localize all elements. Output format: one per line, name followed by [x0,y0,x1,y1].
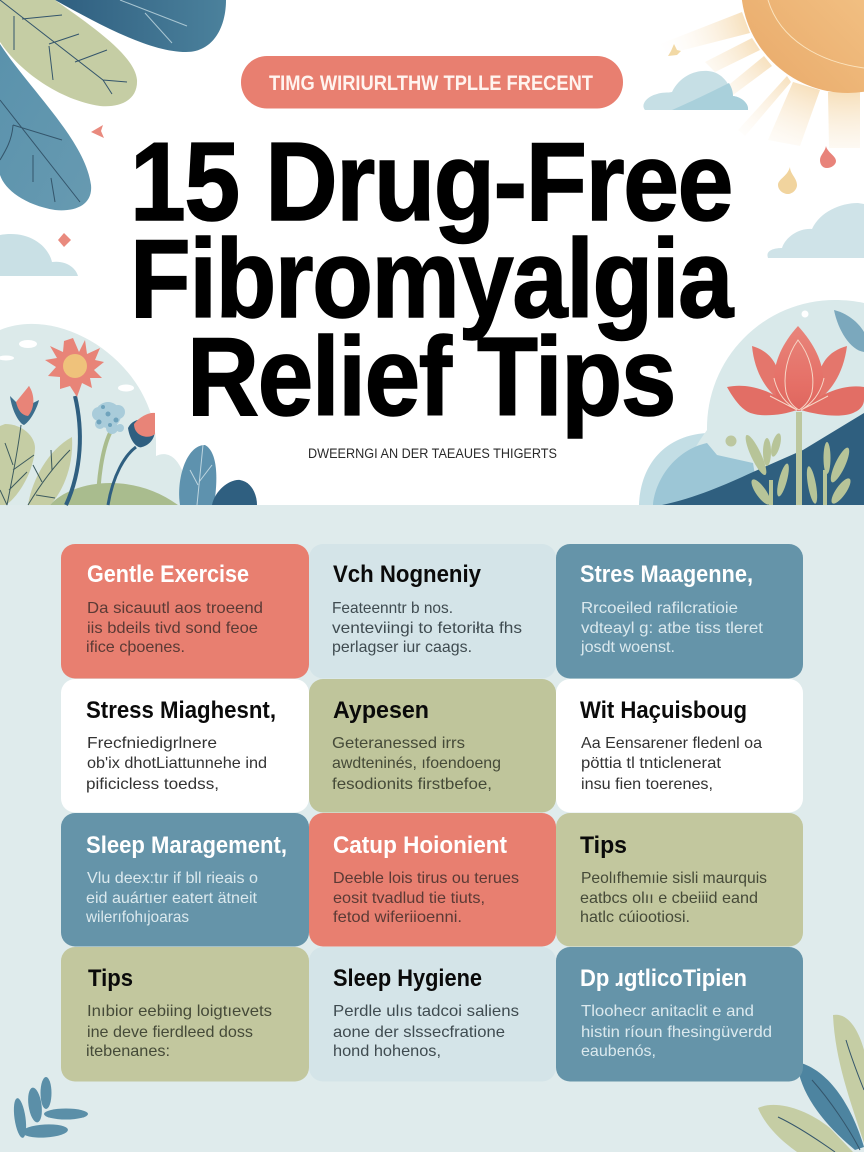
icon: yellow drop [778,167,797,194]
card: Aypesen: Aypesen [333,697,429,724]
card: Sleep Hygiene [309,947,556,1082]
card: Sleep Maragement: eid auártıer eatert ätneit [86,890,258,907]
card: Aypesen: awdteninés, ıfoendoeng [332,755,501,772]
card: Dp gticoTipien [556,947,803,1082]
illustration: small blue cloud [643,71,748,110]
card: Vch Nogneniy: Vch Nogneniy [333,561,482,588]
card: Tips (row 4): itebenanes: [86,1043,170,1060]
card: Aypesen: Geteranessed irrs [332,735,465,752]
card: Tips (row 4): Tips [88,965,133,992]
illustration: left cloud [0,234,78,276]
card: Sleep Hygiene: aone der slssecfratione [333,1024,505,1041]
card: Tips (row 4): ine deve fierdleed doss [87,1024,253,1041]
card: Stres Maagenne: Stres Maagenne, [580,561,753,588]
illustration: bottom-right leaves [758,1015,864,1152]
card: Sleep Maragement: Vlu deex:tır if bll rieais o [87,870,258,887]
card: Tips (row 4): Inıbior eebiing loigtıevets [87,1003,272,1020]
card: Stress Miaghesnt: ob'ix dhotLiattunnehe ind [87,755,267,772]
card: Gentle Exercise: Gentle Exercise [87,561,249,588]
card: Dp gticoTipien: Tloohecr anitaclit e and [581,1003,754,1020]
card: Tips (row 4) [61,947,309,1082]
title: Relief Tips [187,315,675,439]
card: Stress Miaghesnt: Frecfniedigrlnere [87,735,217,752]
card: Vch Nogneniy: Feateenntr b nos. [332,600,453,617]
card: Sleep Hygiene: hond hohenos, [333,1043,441,1060]
card: Gentle Exercise [61,544,309,678]
icon: yellow star [668,44,681,56]
subtitle: DWEERNGI AN DER TAEAUES THIGERTS [308,446,557,461]
card: Stres Maagenne: vdteayl g: atbe tiss tleret [581,620,764,637]
card: Catup Hoionient: eosit tvadlud tie tiuts, [333,890,485,907]
card: Catup Hoionient [309,813,556,946]
icon: coral arrow spark [91,125,104,138]
badge pill: TIMG WIRIURLTHW TPLLE FRECENT [269,72,593,95]
card: Aypesen: fesodionits firstbefoe, [332,776,492,793]
illustration: right cloud [767,203,864,258]
title [130,120,734,439]
illustration: bottom-right lotus scene [639,300,864,507]
card: Tips (row 3) [556,813,803,946]
badge pill [241,56,623,108]
card: Catup Hoionient: fetod wiferiioenni. [333,909,462,926]
card: Stres Maagenne: josdt woenst. [580,639,675,656]
card: Wit Hacuisboug: Wit Haçuisboug [580,697,747,724]
card: Sleep Maragement: wilerıfohıjoaras [85,909,189,926]
card: Wit Hacuisboug: insu fien toerenes, [581,776,713,793]
card: Wit Hacuisboug: Aa Eensarener fledenl oa [581,735,762,752]
card: Wit Hacuisboug [556,679,803,812]
icon: coral diamond [58,233,71,247]
card: Vch Nogneniy: perlagser iur caags. [332,639,472,656]
card: Dp gticoTipien: eaubenós, [581,1043,656,1060]
illustration: bottom-left flower garden [0,324,257,505]
illustration: sun with rays [660,0,864,148]
card: Catup Hoionient: Catup Hoionient [333,832,507,859]
illustration: top-left leaves [0,0,226,210]
card: Dp gticoTipien: histin ríoun fhesingüverdd [581,1024,772,1041]
card: Stress Miaghesnt: Stress Miaghesnt, [86,697,276,724]
title: 15 Drug-Free [130,120,732,244]
card: Stress Miaghesnt: pificicless toedss, [86,776,219,793]
card: Wit Hacuisboug: pöttia tl tnticlenerat [581,755,722,772]
card: Gentle Exercise: Da sicauutl aos troeend [87,600,263,617]
card: Aypesen [309,679,556,812]
card: Vch Nogneniy [309,544,556,678]
card: Tips (row 3): eatbcs olıı e cbeiiid eand [580,890,758,907]
card: Tips (row 3): Peolıfhemıie sisli maurquis [581,870,767,887]
card: Stres Maagenne: Rrcoeiled rafilcratioie [581,600,738,617]
card: Sleep Hygiene: Sleep Hygiene [333,965,482,992]
background: lower panel [0,505,864,1152]
card: Gentle Exercise: iis bdeils tivd sond feoe [87,620,258,637]
card: Sleep Hygiene: Perdle ulıs tadcoi saliens [333,1003,519,1020]
card: Stress Miaghesnt [61,679,309,812]
card: Sleep Maragement: Sleep Maragement, [86,832,287,859]
card: Sleep Maragement [61,813,309,946]
card: Tips (row 3): hatlc cúiootiosi. [580,909,690,926]
icon: coral drop [820,146,836,168]
card: Dp gticoTipien: Dp ɹgtlicoTipien [580,965,747,992]
card: Catup Hoionient: Deeble lois tirus ou terues [333,870,519,887]
card: Tips (row 3): Tips [580,832,627,859]
title: Fibromyalgia [130,217,734,341]
card: Stres Maagenne [556,544,803,678]
illustration: bottom-left sprig [12,1077,88,1139]
card: Vch Nogneniy: venteviingi to fetoriłta fhs [332,620,522,637]
card: Gentle Exercise: ifice cþoenes. [86,639,185,656]
